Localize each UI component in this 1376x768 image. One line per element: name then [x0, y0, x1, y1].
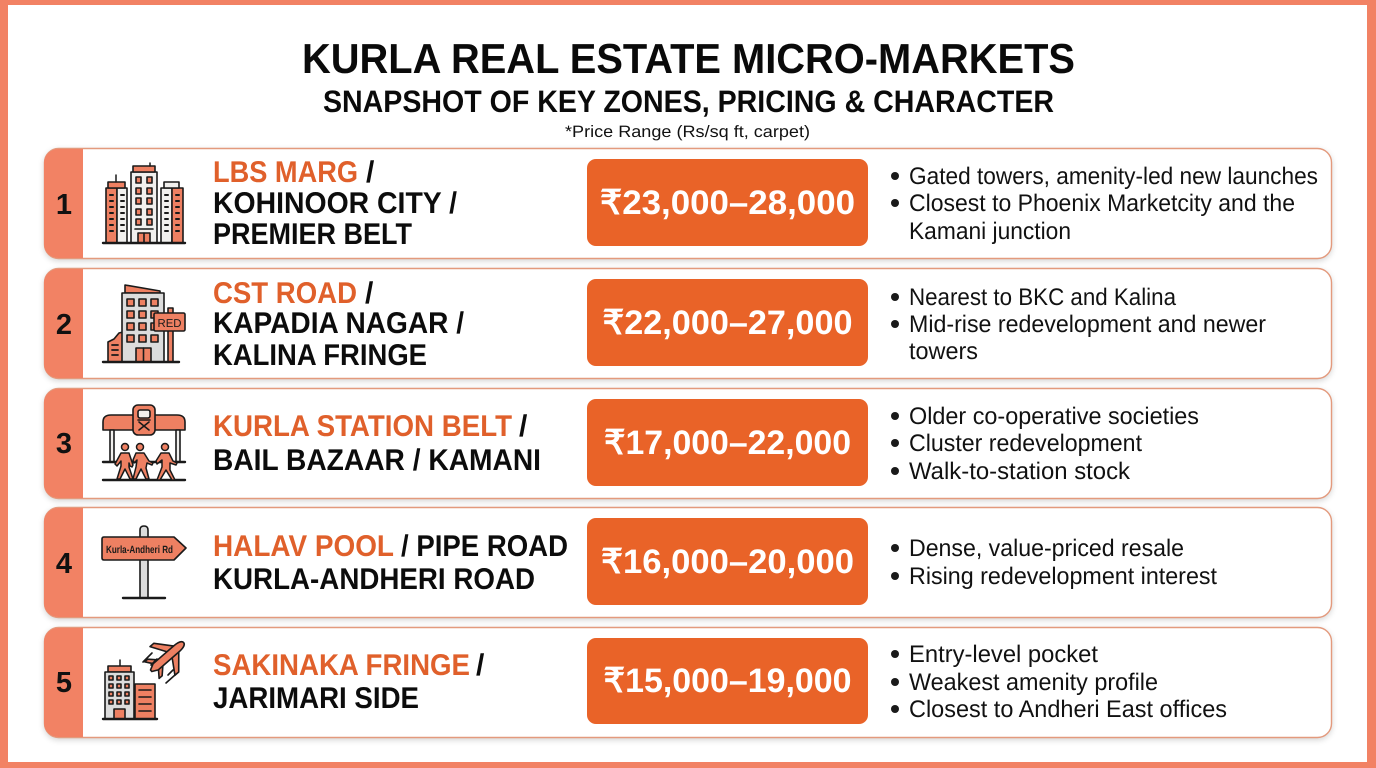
location name 1: LBS MARG — [213, 156, 358, 189]
panel: row 4 Halav Pool — [44, 508, 1332, 618]
location name 5: / — [476, 649, 485, 682]
location name 2: / — [365, 277, 374, 310]
subtitle: SNAPSHOT OF KEY ZONES, PRICING & CHARACTER — [323, 84, 1054, 119]
row number 2: 2 — [56, 309, 72, 341]
location name 4 — [213, 530, 568, 596]
price pill 1 — [587, 159, 868, 246]
location name 5: JARIMARI SIDE — [213, 682, 419, 715]
title block — [302, 35, 1075, 141]
icon: station with commuters — [103, 405, 185, 480]
row number 5: 5 — [56, 667, 72, 699]
location name 3: KURLA STATION BELT — [213, 410, 512, 443]
sign text: Kurla-Andheri Rd — [106, 544, 173, 556]
price pill 2: ₹22,000–27,000 — [602, 304, 852, 342]
bullets 5: Entry-level pocket — [909, 641, 1098, 668]
price pill 3 — [587, 399, 868, 486]
bullets 5 — [891, 641, 1227, 723]
bullets 3: Older co-operative societies — [909, 403, 1199, 430]
location name 3: BAIL BAZAAR / KAMANI — [213, 444, 541, 477]
bullets 3 — [891, 403, 1199, 485]
bullets 5: Weakest amenity profile — [909, 669, 1158, 696]
location name 5 — [213, 649, 485, 715]
location name 4: KURLA-ANDHERI ROAD — [213, 563, 535, 596]
location name 2: KALINA FRINGE — [213, 339, 427, 372]
location name 1 — [213, 156, 458, 251]
location name 3: / — [519, 410, 528, 443]
panel: row 3 Kurla Station Belt — [44, 388, 1332, 498]
location name 1: / — [366, 156, 375, 189]
price pill 4 — [587, 518, 868, 605]
bullets 3: Walk-to-station stock — [909, 458, 1131, 485]
sign text: RED — [158, 318, 182, 330]
row number 1: 1 — [56, 189, 72, 221]
location name 2: KAPADIA NAGAR / — [213, 307, 465, 340]
main title: KURLA REAL ESTATE MICRO-MARKETS — [302, 35, 1075, 82]
price pill 2 — [587, 279, 868, 366]
icon: redevelopment building — [103, 285, 185, 362]
location name 2 — [213, 277, 465, 372]
bullets 2: Mid-rise redevelopment and newer — [909, 311, 1266, 338]
price pill 4: ₹16,000–20,000 — [601, 543, 854, 581]
row number 4: 4 — [56, 548, 72, 580]
location name 1: KOHINOOR CITY / — [213, 187, 458, 220]
bullets 4: Dense, value-priced resale — [909, 535, 1184, 562]
price pill 3: ₹17,000–22,000 — [604, 424, 851, 462]
bullets 2 — [891, 284, 1266, 365]
bullets 1: Kamani junction — [909, 218, 1071, 245]
icon: office and airplane — [103, 628, 196, 719]
location name 1: PREMIER BELT — [213, 218, 412, 251]
bullets 2: towers — [909, 338, 978, 365]
icon: apartment towers — [103, 163, 185, 243]
price pill 5: ₹15,000–19,000 — [604, 662, 852, 700]
price pill 5 — [587, 638, 868, 724]
panel: row 1 LBS Marg — [44, 148, 1332, 258]
location name 5: SAKINAKA FRINGE — [213, 649, 470, 682]
bullets 4 — [891, 535, 1217, 590]
bullets 5: Closest to Andheri East offices — [909, 696, 1227, 723]
bullets 3: Cluster redevelopment — [909, 430, 1142, 457]
panel: row 5 Sakinaka Fringe — [44, 628, 1332, 738]
bullets 2: Nearest to BKC and Kalina — [909, 284, 1177, 311]
price range note: *Price Range (Rs/sq ft, carpet) — [565, 123, 810, 141]
panel: row 2 CST Road — [44, 268, 1332, 378]
bullets 1: Closest to Phoenix Marketcity and the — [909, 190, 1295, 217]
bullets 1: Gated towers, amenity-led new launches — [909, 163, 1318, 190]
location name 4: / PIPE ROAD — [401, 530, 568, 563]
row number 3: 3 — [56, 428, 72, 460]
bullets 4: Rising redevelopment interest — [909, 563, 1217, 590]
price pill 1: ₹23,000–28,000 — [600, 184, 855, 222]
bullets 1 — [891, 163, 1318, 245]
location name 4: HALAV POOL — [213, 530, 394, 563]
location name 3 — [213, 410, 541, 477]
icon: road signpost — [102, 526, 186, 598]
location name 2: CST ROAD — [213, 277, 357, 310]
